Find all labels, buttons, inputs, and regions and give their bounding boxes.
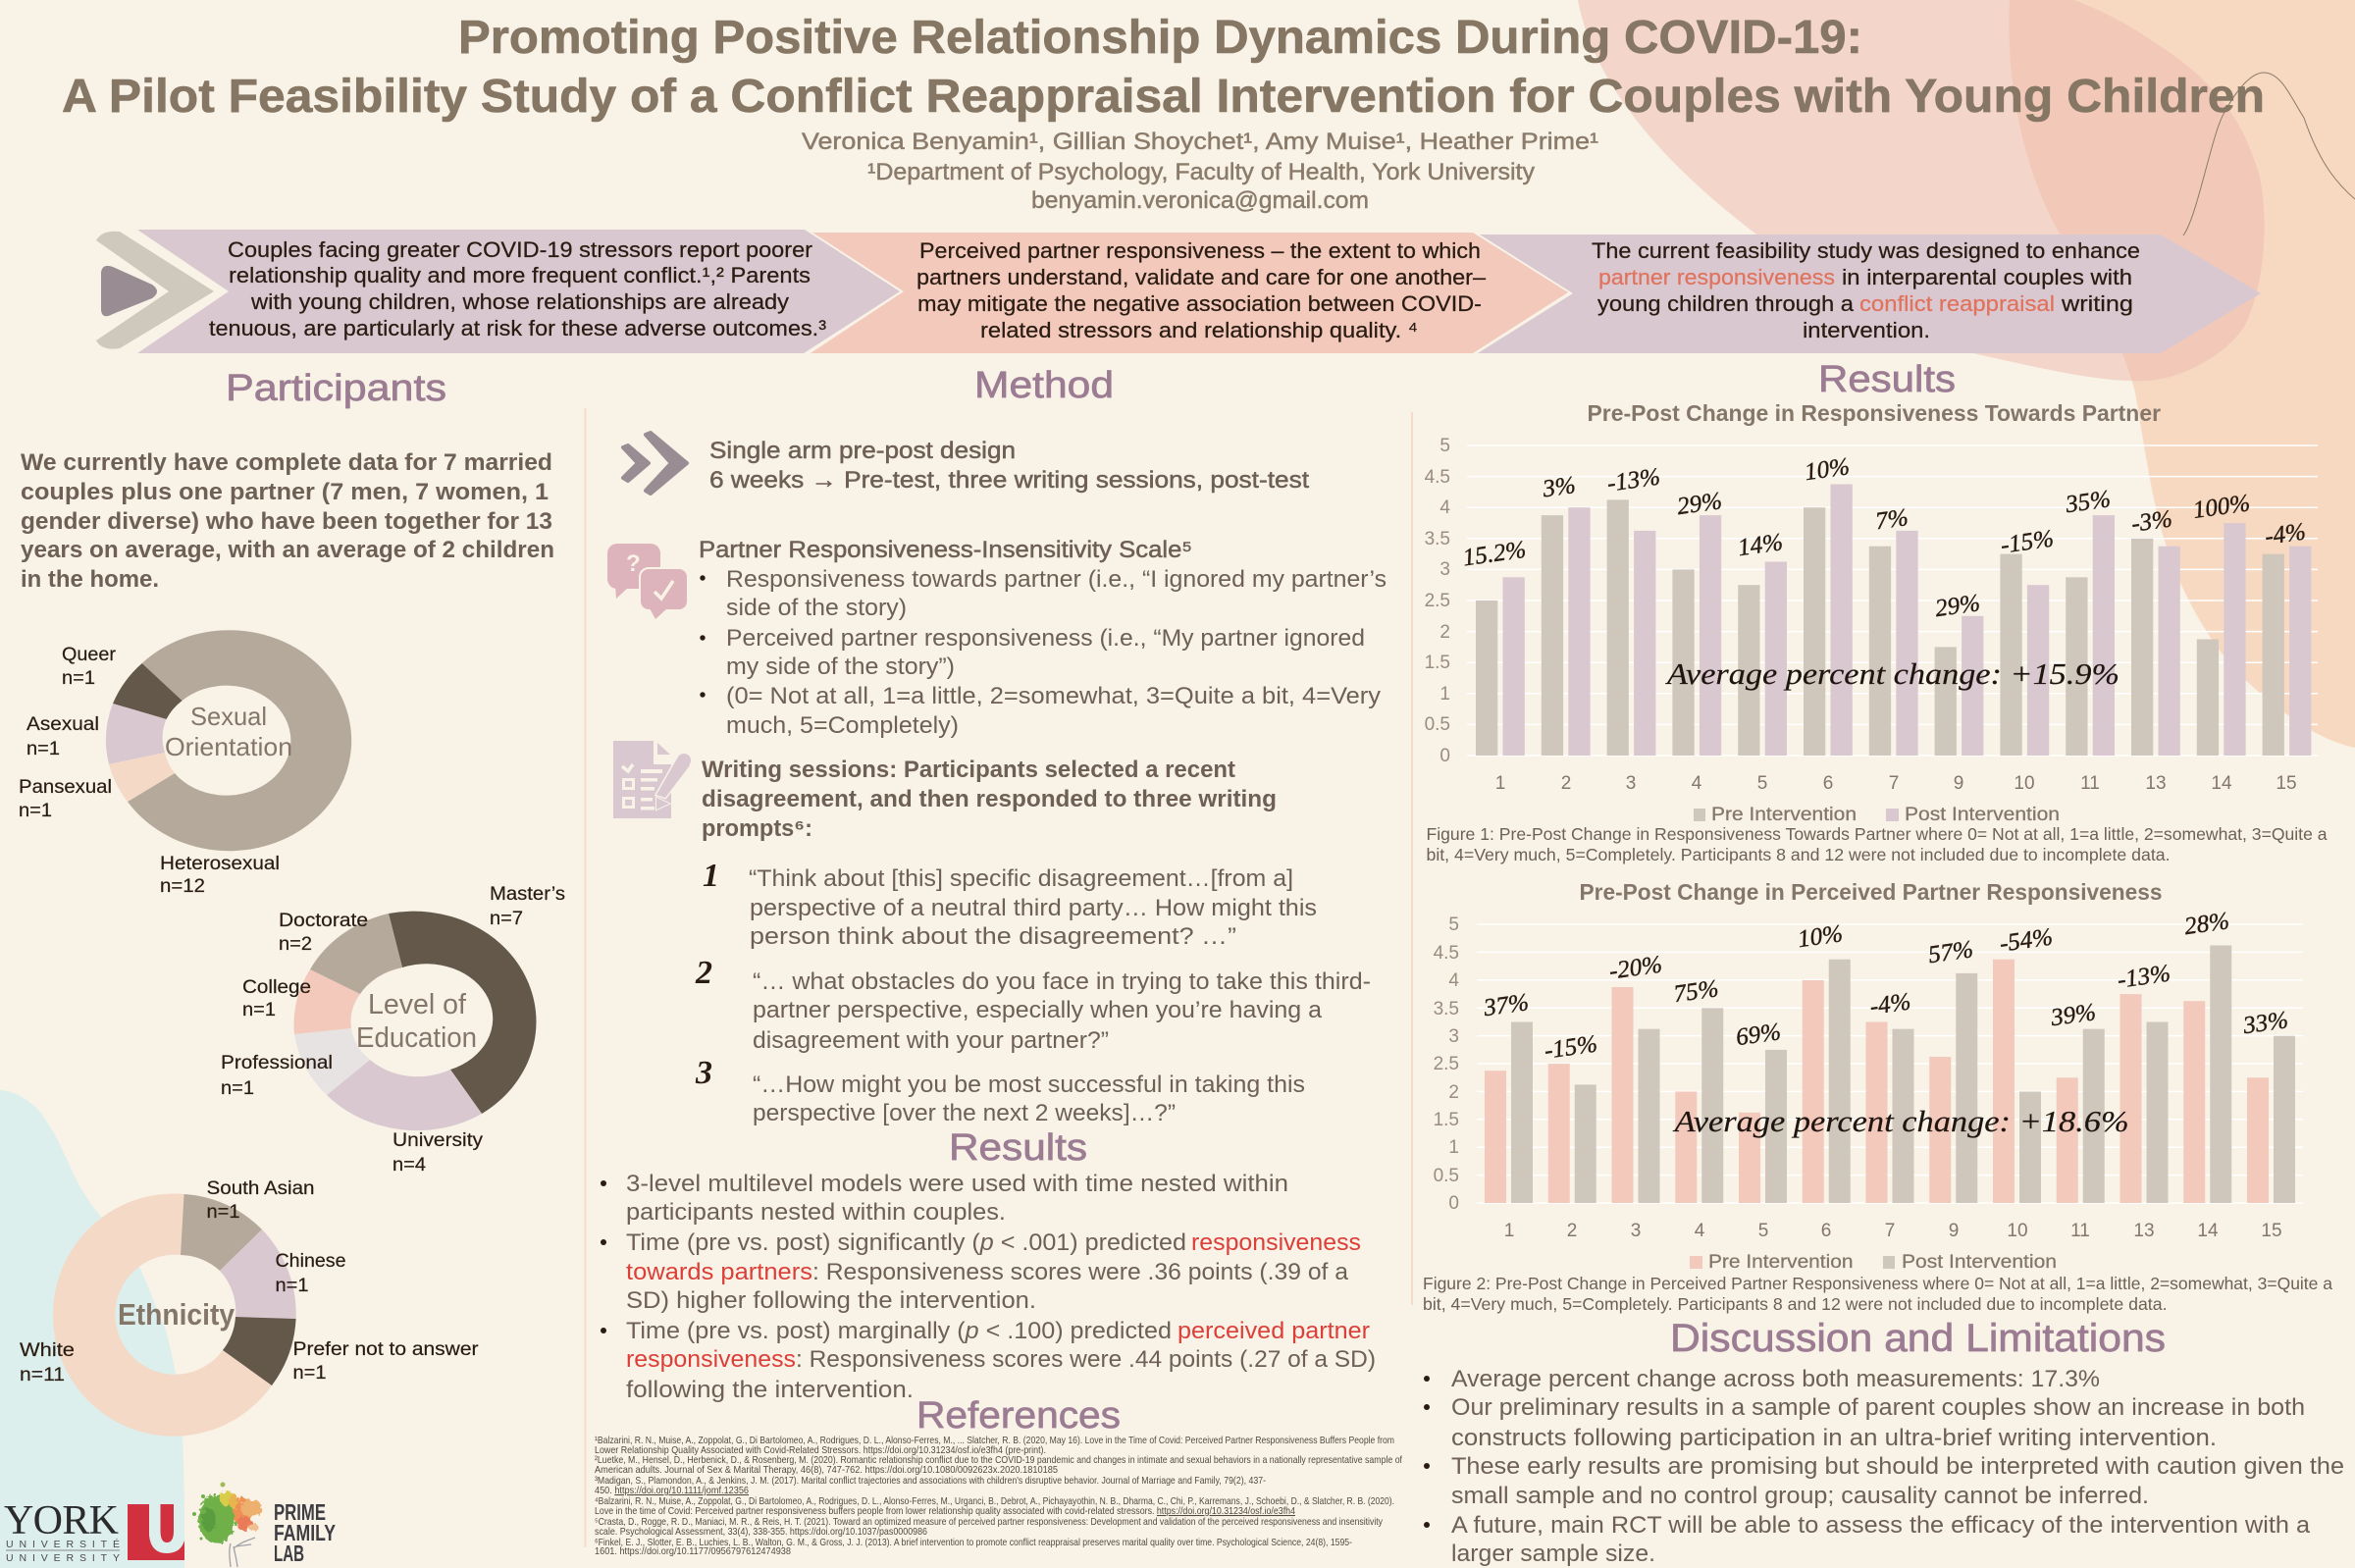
panel: references xyxy=(595,1395,1402,1557)
scale description xyxy=(699,537,1387,739)
title: A Pilot Feasibility Study of a Conflict Reappraisal Intervention for Couples with Young Children xyxy=(62,71,2265,123)
authors and affiliation xyxy=(802,129,1598,214)
banner arrow: study aim: young children through a xyxy=(1597,291,1855,316)
discussion bullets: Average percent change across both measurements: 17.3% xyxy=(1451,1366,2100,1392)
x axis labels: 11 xyxy=(2080,773,2100,794)
participants summary text: years on average, with an average of 2 children xyxy=(21,537,554,563)
y axis labels: 1 xyxy=(1448,1137,1459,1158)
results bullets: SD) higher following the intervention. xyxy=(626,1287,1036,1314)
y axis labels: 4.5 xyxy=(1425,467,1450,488)
percent change labels: -3% xyxy=(2129,505,2173,538)
y axis labels: 0.5 xyxy=(1425,714,1450,735)
percent change labels: 14% xyxy=(1736,529,1785,561)
heading: participants: Participants xyxy=(226,368,446,409)
donut chart: ethnicity: Ethnicity xyxy=(118,1297,236,1332)
heading: method: Method xyxy=(974,365,1114,406)
reference list: Lower Relationship Quality Associated with Covid-Related Stressors. https://doi.org/10.31234/osf.io/e3fh4 (pre-print). xyxy=(595,1444,1046,1456)
percent change labels xyxy=(1481,908,2290,1065)
x axis labels: 4 xyxy=(1695,1221,1705,1241)
panel: participants xyxy=(19,368,565,1437)
percent change labels: 29% xyxy=(1933,590,1982,622)
percent change labels: -4% xyxy=(1868,988,1912,1020)
percent change labels: 29% xyxy=(1675,488,1724,520)
reference list: 1601. https://doi.org/10.1177/0956797612474938 xyxy=(595,1545,791,1557)
reference list: American adults. Journal of Sex & Marital Therapy, 46(8), 747-762. https://doi.org/10.1080/0092623x.2020.1810185 xyxy=(595,1464,1058,1476)
y axis labels: 3.5 xyxy=(1425,529,1450,549)
donut chart: ethnicity: Chinese xyxy=(275,1251,345,1272)
donut chart: level of education: Doctorate xyxy=(279,911,368,931)
percent change labels xyxy=(1461,453,2307,622)
participants summary text: We currently have complete data for 7 married xyxy=(21,449,552,476)
donut chart: level of education: Level of xyxy=(368,989,467,1020)
logo: Prime Family Lab: PRIME xyxy=(274,1499,326,1525)
donut chart: level of education: n=7 xyxy=(490,909,523,929)
y axis labels: 4.5 xyxy=(1434,943,1459,964)
writing prompt 2: partner perspective, especially when you’re having a xyxy=(753,997,1322,1023)
x axis labels xyxy=(1504,1221,2282,1241)
participants summary text: gender diverse) who have been together for 13 xyxy=(21,508,552,535)
legend: Post Intervention xyxy=(1902,1252,2057,1273)
title xyxy=(62,12,2265,123)
legend: Pre Intervention xyxy=(1708,1252,1853,1273)
donut chart: sexual orientation: n=1 xyxy=(26,739,60,759)
donut chart: level of education: n=1 xyxy=(221,1078,254,1099)
donut chart: level of education: n=4 xyxy=(392,1155,426,1176)
participants summary text: couples plus one partner (7 men, 7 women, 1 xyxy=(21,479,549,505)
donut chart: level of education: n=1 xyxy=(242,1000,276,1020)
x axis labels: 6 xyxy=(1823,773,1833,794)
banner arrow: background: relationship quality and more frequent conflict.¹,² Parents xyxy=(229,263,811,287)
x axis labels: 14 xyxy=(2211,773,2232,794)
donut chart: level of education: n=2 xyxy=(279,934,312,955)
percent change labels: 57% xyxy=(1926,936,1975,968)
y axis labels: 4 xyxy=(1448,970,1459,991)
results bullets: : Responsiveness scores were .36 points (.39 of a xyxy=(812,1259,1348,1285)
logo: York University: UNIVERSITY xyxy=(6,1552,120,1564)
donut chart: sexual orientation: n=1 xyxy=(62,668,95,689)
average percent change note: Average percent change: +15.9% xyxy=(1665,656,2120,691)
results bullets xyxy=(601,1171,1376,1403)
donut chart: sexual orientation: Asexual xyxy=(26,714,99,735)
writing sessions intro: disagreement, and then responded to three writing xyxy=(702,786,1277,812)
discussion bullets: A future, main RCT will be able to assess the efficacy of the intervention with a xyxy=(1451,1512,2310,1539)
writing prompt 1: 1 xyxy=(703,858,719,894)
writing prompt 3: “…How might you be most successful in taking this xyxy=(753,1071,1305,1098)
donut chart: ethnicity: South Asian xyxy=(206,1178,314,1199)
writing prompt 1: perspective of a neutral third party… How might this xyxy=(750,895,1317,921)
donut chart: ethnicity: n=1 xyxy=(292,1363,326,1384)
scale description: much, 5=Completely) xyxy=(726,712,959,739)
figure 1 caption: Figure 1: Pre-Post Change in Responsiveness Towards Partner where 0= Not at all, 1=a little, 2=somewhat, 3=Quite a xyxy=(1427,824,2328,844)
x axis labels: 15 xyxy=(2261,1221,2282,1241)
x axis labels: 3 xyxy=(1626,773,1636,794)
bar chart: perceived partner responsiveness xyxy=(1434,879,2303,1273)
donut chart: level of education: Education xyxy=(356,1022,477,1054)
x axis labels: 9 xyxy=(1949,1221,1959,1241)
writing prompt 3 xyxy=(695,1055,1305,1126)
donut chart: level of education: Master’s xyxy=(490,884,565,905)
banner arrow: mitigating factor: may mitigate the negative association between COVID- xyxy=(917,291,1482,316)
heading: results: Results xyxy=(949,1127,1087,1169)
donut chart: sexual orientation: n=12 xyxy=(160,876,205,897)
x axis labels: 5 xyxy=(1757,773,1767,794)
reference list: ⁶Finkel, E. J., Slotter, E. B., Luchies, L. B., Walton, G. M., & Gross, J. J. (2013). A brief intervention to promote conflict reappraisal preserves marital quality over time. Psychological Science, 24(8), 1595- xyxy=(595,1537,1352,1548)
participants summary text xyxy=(21,449,554,593)
donut chart: sexual orientation: n=1 xyxy=(19,801,52,821)
y axis labels: 3.5 xyxy=(1434,999,1459,1019)
percent change labels: 10% xyxy=(1803,453,1852,486)
scale description: side of the story) xyxy=(726,595,907,621)
authors and affiliation: ¹Department of Psychology, Faculty of Health, York University xyxy=(867,159,1535,185)
results bullets: 3-level multilevel models were used with time nested within xyxy=(626,1171,1288,1197)
reference list: Love in the time of Covid: Perceived partner responsiveness buffers people from lower relationship quality associated with covid-related stressors. https://doi.org/10.31234/osf.io/e3fh4 xyxy=(595,1505,1295,1517)
percent change labels: 15.2% xyxy=(1461,537,1528,571)
percent change labels: 28% xyxy=(2182,908,2231,940)
y axis labels: 1.5 xyxy=(1425,653,1450,673)
icon: speech bubbles xyxy=(607,544,688,619)
donut chart: level of education: Professional xyxy=(221,1053,333,1073)
y axis labels: 5 xyxy=(1439,436,1450,456)
y axis labels: 2 xyxy=(1448,1082,1459,1103)
donut chart: sexual orientation xyxy=(19,630,351,897)
y axis labels: 2.5 xyxy=(1434,1054,1459,1074)
x axis labels: 9 xyxy=(1954,773,1963,794)
percent change labels: 75% xyxy=(1672,975,1720,1008)
banner arrow: background: Couples facing greater COVID-19 stressors report poorer xyxy=(228,237,813,262)
writing prompt 2: disagreement with your partner?” xyxy=(753,1027,1109,1054)
percent change labels: 39% xyxy=(2048,999,2098,1031)
figure 2 caption: Figure 2: Pre-Post Change in Perceived Partner Responsiveness where 0= Not at all, 1=a little, 2=somewhat, 3=Quite a xyxy=(1423,1274,2332,1293)
x axis labels xyxy=(1495,773,2297,794)
x axis labels: 14 xyxy=(2197,1221,2219,1241)
writing prompt 3: 3 xyxy=(695,1055,712,1091)
x axis labels: 2 xyxy=(1561,773,1571,794)
panel: results text xyxy=(601,1127,1376,1403)
donut chart: sexual orientation: Pansexual xyxy=(19,777,112,798)
banner arrow: background: tenuous, are particularly at risk for these adverse outcomes.³ xyxy=(209,316,827,340)
writing prompt 1: person think about the disagreement? …” xyxy=(750,923,1236,950)
writing prompt 2: 2 xyxy=(695,955,712,991)
writing prompt 3: perspective [over the next 2 weeks]…?” xyxy=(753,1100,1176,1126)
banner arrow: study aim: intervention. xyxy=(1803,318,1930,342)
donut chart: level of education xyxy=(221,884,565,1176)
discussion bullets: larger sample size. xyxy=(1451,1541,1655,1567)
percent change labels: -13% xyxy=(1605,463,1662,497)
discussion bullets: constructs following participation in an ultra-brief writing intervention. xyxy=(1451,1425,2217,1451)
writing sessions intro: prompts⁶: xyxy=(702,815,812,842)
x axis labels: 13 xyxy=(2145,773,2167,794)
average percent change note: Average percent change: +18.6% xyxy=(1672,1104,2129,1138)
banner arrow: background: with young children, whose relationships are already xyxy=(250,289,790,314)
scale description: Responsiveness towards partner (i.e., “I ignored my partner’s xyxy=(726,566,1387,593)
participants summary text: in the home. xyxy=(21,566,159,593)
post intervention bars xyxy=(1503,485,2311,756)
icon: checklist and pencil xyxy=(613,741,691,818)
icon: watercolour tree xyxy=(192,1482,262,1567)
banner arrow: study aim: conflict reappraisal xyxy=(1859,291,2055,316)
x axis labels: 3 xyxy=(1631,1221,1641,1241)
scale description: Perceived partner responsiveness (i.e., “My partner ignored xyxy=(726,625,1365,652)
writing prompt 2: “… what obstacles do you face in trying to take this third- xyxy=(753,968,1371,995)
legend: Pre Intervention xyxy=(1711,805,1857,825)
writing prompt 1: “Think about [this] specific disagreement…[from a] xyxy=(749,865,1293,892)
x axis labels: 10 xyxy=(2014,773,2035,794)
design summary: Single arm pre-post design xyxy=(709,438,1016,464)
reference list: ²Luetke, M., Hensel, D., Herbenick, D., & Rosenberg, M. (2020). Romantic relationship conflict due to the COVID-19 pandemic and changes in intimate and sexual behaviors in a nationally representative sample of xyxy=(595,1454,1402,1466)
y axis labels: 2 xyxy=(1439,622,1450,643)
figure 1 caption: bit, 4=Very much, 5=Completely. Participants 8 and 12 were not included due to incomplete data. xyxy=(1427,845,2171,864)
percent change labels: -20% xyxy=(1607,951,1664,985)
donut chart: level of education: College xyxy=(242,977,311,998)
y axis labels: 0.5 xyxy=(1434,1166,1459,1186)
writing sessions intro xyxy=(702,757,1277,842)
post intervention bars xyxy=(1511,945,2295,1203)
percent change labels: -13% xyxy=(2116,960,2172,994)
authors and affiliation: benyamin.veronica@gmail.com xyxy=(1031,187,1369,214)
figure 1 caption xyxy=(1427,824,2328,864)
banner arrow: study aim: writing xyxy=(2061,291,2133,316)
reference list xyxy=(595,1435,1402,1557)
heading: discussion: Discussion and Limitations xyxy=(1670,1317,2166,1360)
x axis labels: 7 xyxy=(1889,773,1899,794)
design summary: 6 weeks → Pre-test, three writing sessions, post-test xyxy=(709,467,1309,494)
banner arrow: study aim: The current feasibility study was designed to enhance xyxy=(1592,238,2140,263)
y axis labels: 1 xyxy=(1439,684,1450,705)
reference list: ³Madigan, S., Plamondon, A., & Jenkins, J. M. (2017). Marital conflict trajectories and associations with children's disruptive behavior. Journal of Marriage and Family, 79(2), 437- xyxy=(595,1475,1266,1487)
legend xyxy=(1690,1252,2057,1273)
reference list: 450. https://doi.org/10.1111/jomf.12356 xyxy=(595,1485,749,1496)
logo: York University: YORK xyxy=(4,1498,119,1543)
x axis labels: 5 xyxy=(1758,1221,1768,1241)
donut chart: ethnicity: White xyxy=(20,1340,75,1361)
discussion bullets: small sample and no control group; causality cannot be inferred. xyxy=(1451,1483,2149,1509)
percent change labels: -4% xyxy=(2263,518,2307,550)
y axis labels: 5 xyxy=(1448,915,1459,935)
reference list: ⁴Balzarini, R. N., Muise, A., Zoppolat, G., Di Bartolomeo, A., Rodrigues, D. L., Alonso-Ferres, M., Urganci, B., Debrot, A., Pichayayothin, N. B., Dharma, C., Chi, P., Karremans, J., Schoebi, D., & Slatcher, R. B. (2020). xyxy=(595,1495,1394,1507)
logo: Prime Family Lab xyxy=(192,1482,336,1567)
banner arrow: mitigating factor xyxy=(811,233,1568,353)
percent change labels: -15% xyxy=(1999,525,2056,559)
discussion bullets: These early results are promising but should be interpreted with caution given the xyxy=(1451,1453,2344,1480)
heading: references: References xyxy=(916,1395,1121,1437)
y axis labels xyxy=(1425,436,1450,766)
writing sessions intro: Writing sessions: Participants selected a recent xyxy=(702,757,1235,783)
legend xyxy=(1694,805,2060,825)
x axis labels: 2 xyxy=(1567,1221,1577,1241)
percent change labels: 37% xyxy=(1481,989,1531,1021)
writing prompt 2 xyxy=(695,955,1371,1054)
icon: double chevron xyxy=(623,433,687,494)
y axis labels: 0 xyxy=(1448,1193,1459,1214)
authors and affiliation: Veronica Benyamin¹, Gillian Shoychet¹, Amy Muise¹, Heather Prime¹ xyxy=(802,129,1598,155)
donut chart: sexual orientation: Queer xyxy=(62,645,117,665)
figure 2 caption xyxy=(1423,1274,2332,1314)
x axis labels: 15 xyxy=(2276,773,2297,794)
donut chart: ethnicity: n=1 xyxy=(206,1202,239,1223)
results bullets: participants nested within couples. xyxy=(626,1199,1006,1226)
legend: Post Intervention xyxy=(1905,805,2060,825)
banner arrow: study aim: partner responsiveness xyxy=(1598,265,1835,289)
x axis labels: 7 xyxy=(1885,1221,1895,1241)
logo: York University xyxy=(4,1498,184,1564)
percent change labels: 35% xyxy=(2063,486,2113,518)
x axis labels: 6 xyxy=(1821,1221,1831,1241)
x axis labels: 10 xyxy=(2007,1221,2028,1241)
heading: results charts: Results xyxy=(1818,359,1956,400)
percent change labels: -54% xyxy=(1998,923,2055,958)
donut chart: ethnicity: Prefer not to answer xyxy=(292,1339,479,1360)
discussion bullets xyxy=(1424,1366,2344,1567)
scale description: my side of the story”) xyxy=(726,653,955,680)
x axis labels: 4 xyxy=(1692,773,1702,794)
donut chart: sexual orientation: Sexual xyxy=(190,702,267,731)
donut chart: ethnicity: n=1 xyxy=(275,1276,308,1296)
logo: Prime Family Lab: LAB xyxy=(274,1541,304,1566)
writing prompt 1 xyxy=(703,858,1317,950)
percent change labels: 7% xyxy=(1874,504,1910,535)
results bullets: responsiveness xyxy=(1191,1229,1361,1256)
chart title: Pre-Post Change in Perceived Partner Responsiveness xyxy=(1580,879,2163,905)
percent change labels: 10% xyxy=(1796,920,1845,953)
percent change labels: -15% xyxy=(1543,1030,1599,1065)
y axis labels: 3 xyxy=(1439,559,1450,580)
y axis labels: 1.5 xyxy=(1434,1110,1459,1130)
figure 2 caption: bit, 4=Very much, 5=Completely. Participants 8 and 12 were not included due to incomplete data. xyxy=(1423,1294,2167,1314)
logo: Prime Family Lab: FAMILY xyxy=(274,1520,336,1545)
banner arrow: background xyxy=(137,230,900,353)
logo: York University: UNIVERSITÉ xyxy=(6,1538,120,1550)
panel: discussion and limitations xyxy=(1424,1317,2344,1567)
icon: speech bubbles: ? xyxy=(626,550,641,577)
results bullets: perceived partner xyxy=(1178,1318,1370,1344)
percent change labels: 69% xyxy=(1734,1019,1783,1051)
y axis labels xyxy=(1434,915,1459,1214)
results bullets: towards partners xyxy=(626,1259,812,1285)
banner arrow: mitigating factor: partners understand, validate and care for one another– xyxy=(916,265,1487,289)
y axis labels: 3 xyxy=(1448,1026,1459,1047)
design summary xyxy=(709,438,1309,494)
reference list: ⁵Crasta, D., Rogge, R. D., Maniaci, M. R., & Reis, H. T. (2021). Toward an optimized measure of perceived partner responsiveness: Development and validation of the perceived responsiveness and insensitivity xyxy=(595,1516,1384,1528)
x axis labels: 11 xyxy=(2070,1221,2090,1241)
reference list: ¹Balzarini, R. N., Muise, A., Zoppolat, G., Di Bartolomeo, A., Rodrigues, D. L., Alonso-Ferres, M., ... Slatcher, R. B. (2020, May 16). Love in the Time of Covid: Perceived Partner Responsiveness Buffers People from xyxy=(595,1435,1394,1446)
chart title: Pre-Post Change in Responsiveness Towards Partner xyxy=(1588,400,2161,426)
donut chart: sexual orientation: Orientation xyxy=(165,732,292,761)
y axis labels: 0 xyxy=(1439,746,1450,766)
pre intervention bars xyxy=(1485,960,2269,1203)
title: Promoting Positive Relationship Dynamics During COVID-19: xyxy=(458,12,1862,64)
results bullets: following the intervention. xyxy=(626,1377,914,1403)
y axis labels: 4 xyxy=(1439,497,1450,518)
donut chart: level of education: University xyxy=(392,1130,484,1151)
scale description: (0= Not at all, 1=a little, 2=somewhat, 3=Quite a bit, 4=Very xyxy=(726,683,1382,709)
reference list: scale. Psychological Assessment, 33(4), 338-355. https://doi.org/10.1037/pas0000986 xyxy=(595,1526,927,1538)
results bullets: Time (pre vs. post) significantly ( p < .001) predicted xyxy=(626,1229,1186,1256)
discussion bullets: Our preliminary results in a sample of parent couples show an increase in both xyxy=(1451,1394,2305,1421)
results bullets: responsiveness xyxy=(626,1346,796,1373)
icon: banner chevron xyxy=(96,232,214,349)
banner arrow: study aim xyxy=(1478,235,2261,353)
percent change labels: 3% xyxy=(1541,472,1577,502)
x axis labels: 13 xyxy=(2133,1221,2155,1241)
scale description: Partner Responsiveness-Insensitivity Scale⁵ xyxy=(699,537,1192,563)
results bullets: Time (pre vs. post) marginally ( p < .100) predicted xyxy=(626,1318,1172,1344)
x axis labels: 1 xyxy=(1495,773,1505,794)
percent change labels: 33% xyxy=(2240,1007,2290,1039)
banner arrow: study aim: in interparental couples with xyxy=(1842,265,2132,289)
donut chart: ethnicity xyxy=(20,1178,479,1437)
pre intervention bars xyxy=(1476,499,2284,756)
results bullets: : Responsiveness scores were .44 points (.27 of a SD) xyxy=(796,1346,1376,1373)
donut chart: ethnicity: n=11 xyxy=(20,1365,65,1385)
bar chart: responsiveness towards partner xyxy=(1425,400,2318,825)
y axis labels: 2.5 xyxy=(1425,591,1450,611)
x axis labels: 1 xyxy=(1504,1221,1514,1241)
donut chart: sexual orientation: Heterosexual xyxy=(160,854,280,874)
banner arrow: mitigating factor: Perceived partner responsiveness – the extent to which xyxy=(919,238,1481,263)
panel: method xyxy=(607,365,1387,1126)
percent change labels: 100% xyxy=(2191,490,2252,524)
banner arrow: mitigating factor: related stressors and relationship quality. ⁴ xyxy=(980,318,1418,342)
